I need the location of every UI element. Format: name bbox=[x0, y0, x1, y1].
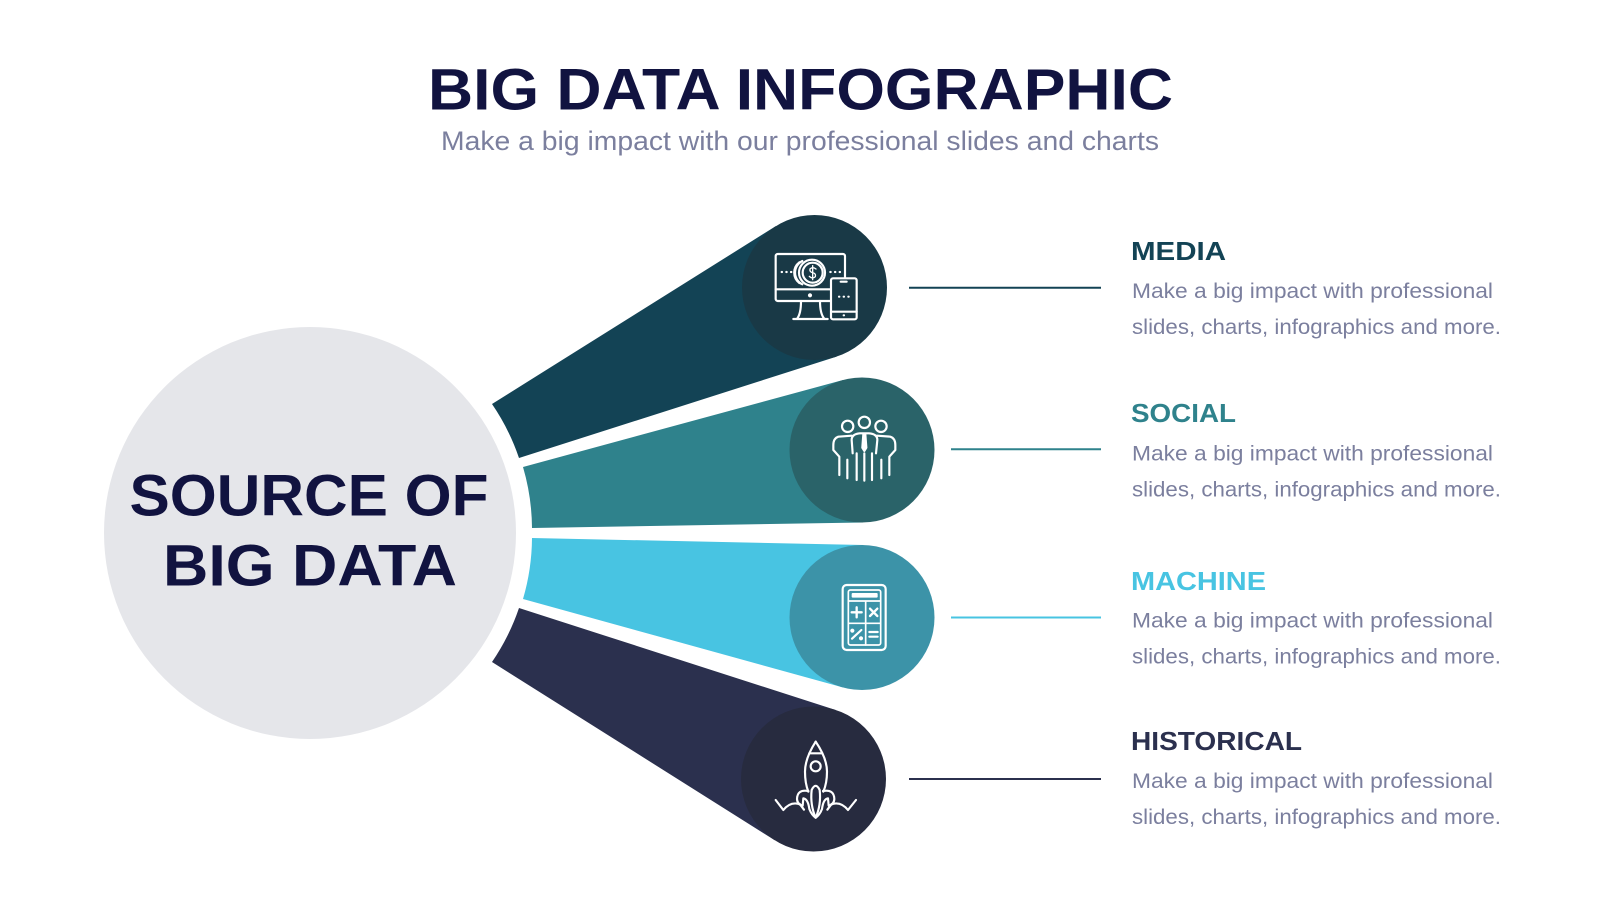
icon: media devices bbox=[742, 215, 887, 360]
ribbon: social bbox=[523, 380, 863, 528]
text block: historical: slides, charts, infographics and more. bbox=[1132, 805, 1501, 829]
connector: media bbox=[909, 287, 1101, 289]
title: BIG DATA INFOGRAPHIC bbox=[428, 58, 1173, 122]
ribbon: machine bbox=[523, 538, 864, 687]
text block: machine: Make a big impact with professional bbox=[1132, 608, 1493, 632]
text block: media bbox=[1131, 238, 1501, 339]
icon: historical rocket bbox=[741, 706, 886, 852]
text block: machine: slides, charts, infographics and more. bbox=[1132, 644, 1501, 668]
text block: social: SOCIAL bbox=[1131, 400, 1236, 428]
connector: machine bbox=[951, 616, 1101, 618]
text block: machine bbox=[1131, 568, 1501, 668]
central circle: source of big data bbox=[104, 327, 516, 739]
subtitle: Make a big impact with our professional slides and charts bbox=[441, 126, 1159, 156]
text block: social bbox=[1131, 400, 1501, 502]
text block: media: MEDIA bbox=[1131, 238, 1226, 266]
text block: social: Make a big impact with professional bbox=[1132, 442, 1493, 466]
text block: historical: Make a big impact with professional bbox=[1132, 769, 1493, 793]
text block: social: slides, charts, infographics and more. bbox=[1132, 478, 1501, 502]
central circle: source of big data: BIG DATA bbox=[163, 534, 457, 598]
text block: machine: MACHINE bbox=[1131, 568, 1266, 596]
ribbon: media bbox=[492, 226, 837, 458]
icon: social people bbox=[790, 378, 934, 522]
text block: media: slides, charts, infographics and more. bbox=[1132, 315, 1501, 339]
text block: historical: HISTORICAL bbox=[1131, 728, 1302, 756]
connector: historical bbox=[909, 778, 1101, 780]
connector: social bbox=[951, 448, 1101, 450]
ribbon: historical bbox=[492, 608, 836, 840]
text block: media: Make a big impact with professional bbox=[1132, 279, 1493, 303]
text block: historical bbox=[1131, 728, 1501, 829]
icon: machine calculator bbox=[790, 545, 934, 690]
central circle: source of big data: SOURCE OF bbox=[130, 464, 488, 528]
